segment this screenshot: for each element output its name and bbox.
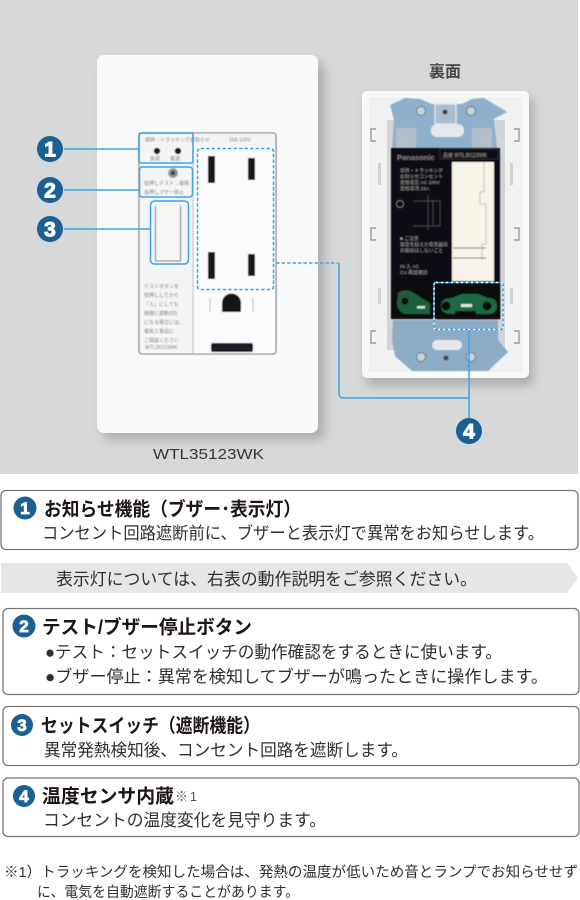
instruction text: 損傷に遮断(切) bbox=[144, 310, 178, 317]
highlight frames bbox=[139, 133, 274, 290]
test button: 長押しブザー停止 bbox=[144, 189, 184, 196]
footnote bbox=[4, 864, 578, 900]
black body and label bbox=[391, 148, 500, 319]
back label text: ■ ご注意 bbox=[400, 235, 419, 242]
panel: temperature sensor: ※1 bbox=[175, 789, 197, 804]
panel: set switch: セットスイッチ（遮断機能） bbox=[41, 715, 260, 737]
leader lines bbox=[64, 149, 469, 420]
back label text: 定格電圧 AC 100V bbox=[400, 179, 441, 186]
panel: set switch: 異常発熱検知後、コンセント回路を遮断します。 bbox=[44, 741, 408, 760]
number marker 3: 3 bbox=[44, 218, 56, 242]
panel: set switch bbox=[3, 706, 579, 766]
number marker 3 bbox=[37, 216, 63, 242]
panel: temperature sensor: 温度センサ内蔵 bbox=[42, 786, 174, 808]
printed model number: WTL35123WK bbox=[145, 345, 178, 351]
panel: test and buzzer stop button: ●ブザー停止：異常を検知してブザーが鳴ったときに操作します。 bbox=[45, 666, 548, 686]
test button: 短押しテスト→復帰 bbox=[144, 180, 189, 187]
back label text: 定格電流 15A bbox=[400, 185, 430, 192]
photo background bbox=[0, 0, 578, 474]
note banner: 表示灯については、右表の動作説明をご参照ください。 bbox=[56, 570, 477, 589]
panel: test and buzzer stop button: ●テスト：セットスイッチの動作確認をするときに使います。 bbox=[45, 642, 502, 662]
panel: notification function bbox=[1, 490, 578, 550]
sensor highlight frame bbox=[434, 282, 503, 330]
control panel insert: 15A 100V bbox=[229, 138, 251, 144]
indicator lamps: 異常 bbox=[150, 156, 160, 162]
number marker 2 bbox=[37, 177, 63, 203]
panel: temperature sensor: 4 bbox=[19, 787, 29, 806]
instruction text: 「入」にしても bbox=[144, 302, 179, 308]
back label text: お知らせコンセント bbox=[400, 173, 443, 180]
mounting frame bbox=[390, 98, 508, 371]
panel: set switch: 3 bbox=[17, 716, 27, 735]
instruction text: テストボタンを bbox=[144, 283, 179, 290]
instruction text: ご相談ください bbox=[144, 337, 179, 344]
panel: notification function: 1 bbox=[20, 499, 30, 518]
footnote: ※1）トラッキングを検知した場合は、発熱の温度が低いため音とランプでお知らせせず bbox=[4, 864, 578, 881]
number marker 1: 1 bbox=[44, 138, 56, 162]
panel: notification function: コンセント回路遮断前に、ブザーと表示灯で異常をお知らせします。 bbox=[42, 523, 544, 543]
heading: back side: 裏面 bbox=[429, 62, 461, 81]
back model text: 品番 WTL35123WK bbox=[443, 152, 488, 159]
number marker 4: 4 bbox=[463, 420, 475, 444]
indicator lamps bbox=[150, 148, 181, 162]
back label text: IN 入 AC bbox=[400, 264, 419, 270]
panel: test and buzzer stop button: 2 bbox=[19, 617, 29, 636]
receptacle slots bbox=[208, 156, 255, 279]
instruction text: 短押ししてから bbox=[144, 292, 179, 299]
indicator lamps: 電源 bbox=[170, 156, 180, 162]
panel: test and buzzer stop button bbox=[3, 608, 579, 694]
panel: notification function: お知らせ機能（ブザー･表示灯） bbox=[44, 498, 301, 520]
number marker 2: 2 bbox=[44, 180, 56, 202]
panel label text: 感熱・トラッキングお知らせ bbox=[145, 136, 210, 144]
note banner bbox=[1, 563, 578, 593]
panel: temperature sensor bbox=[3, 778, 579, 836]
test button bbox=[144, 168, 189, 196]
front view of outlet plate bbox=[97, 55, 325, 440]
lower slot bbox=[211, 343, 253, 352]
panel: test and buzzer stop button: テスト/ブザー停止ボタン bbox=[42, 616, 252, 638]
panel: temperature sensor: コンセントの温度変化を見守ります。 bbox=[43, 811, 326, 830]
model name: WTL35123WK bbox=[153, 446, 264, 463]
control panel insert bbox=[139, 133, 276, 354]
back label text: 容量を超えた電気器具 bbox=[400, 241, 448, 248]
number marker 4 bbox=[456, 418, 482, 444]
back label text: の接続はしないこと bbox=[400, 247, 443, 254]
back label text: CU 再度確認 bbox=[400, 269, 428, 276]
back view of outlet bbox=[362, 91, 533, 385]
set switch bbox=[155, 206, 181, 261]
back label text: 感熱・トラッキング bbox=[400, 167, 443, 174]
instruction text: 電気工事店に bbox=[144, 328, 174, 335]
ground slot bbox=[222, 294, 241, 312]
instruction text: になる場合には、 bbox=[144, 319, 184, 326]
side clips bbox=[371, 129, 519, 343]
terminals bbox=[392, 280, 500, 319]
number marker 1 bbox=[37, 136, 63, 162]
brand text: Panasonic bbox=[397, 153, 435, 162]
